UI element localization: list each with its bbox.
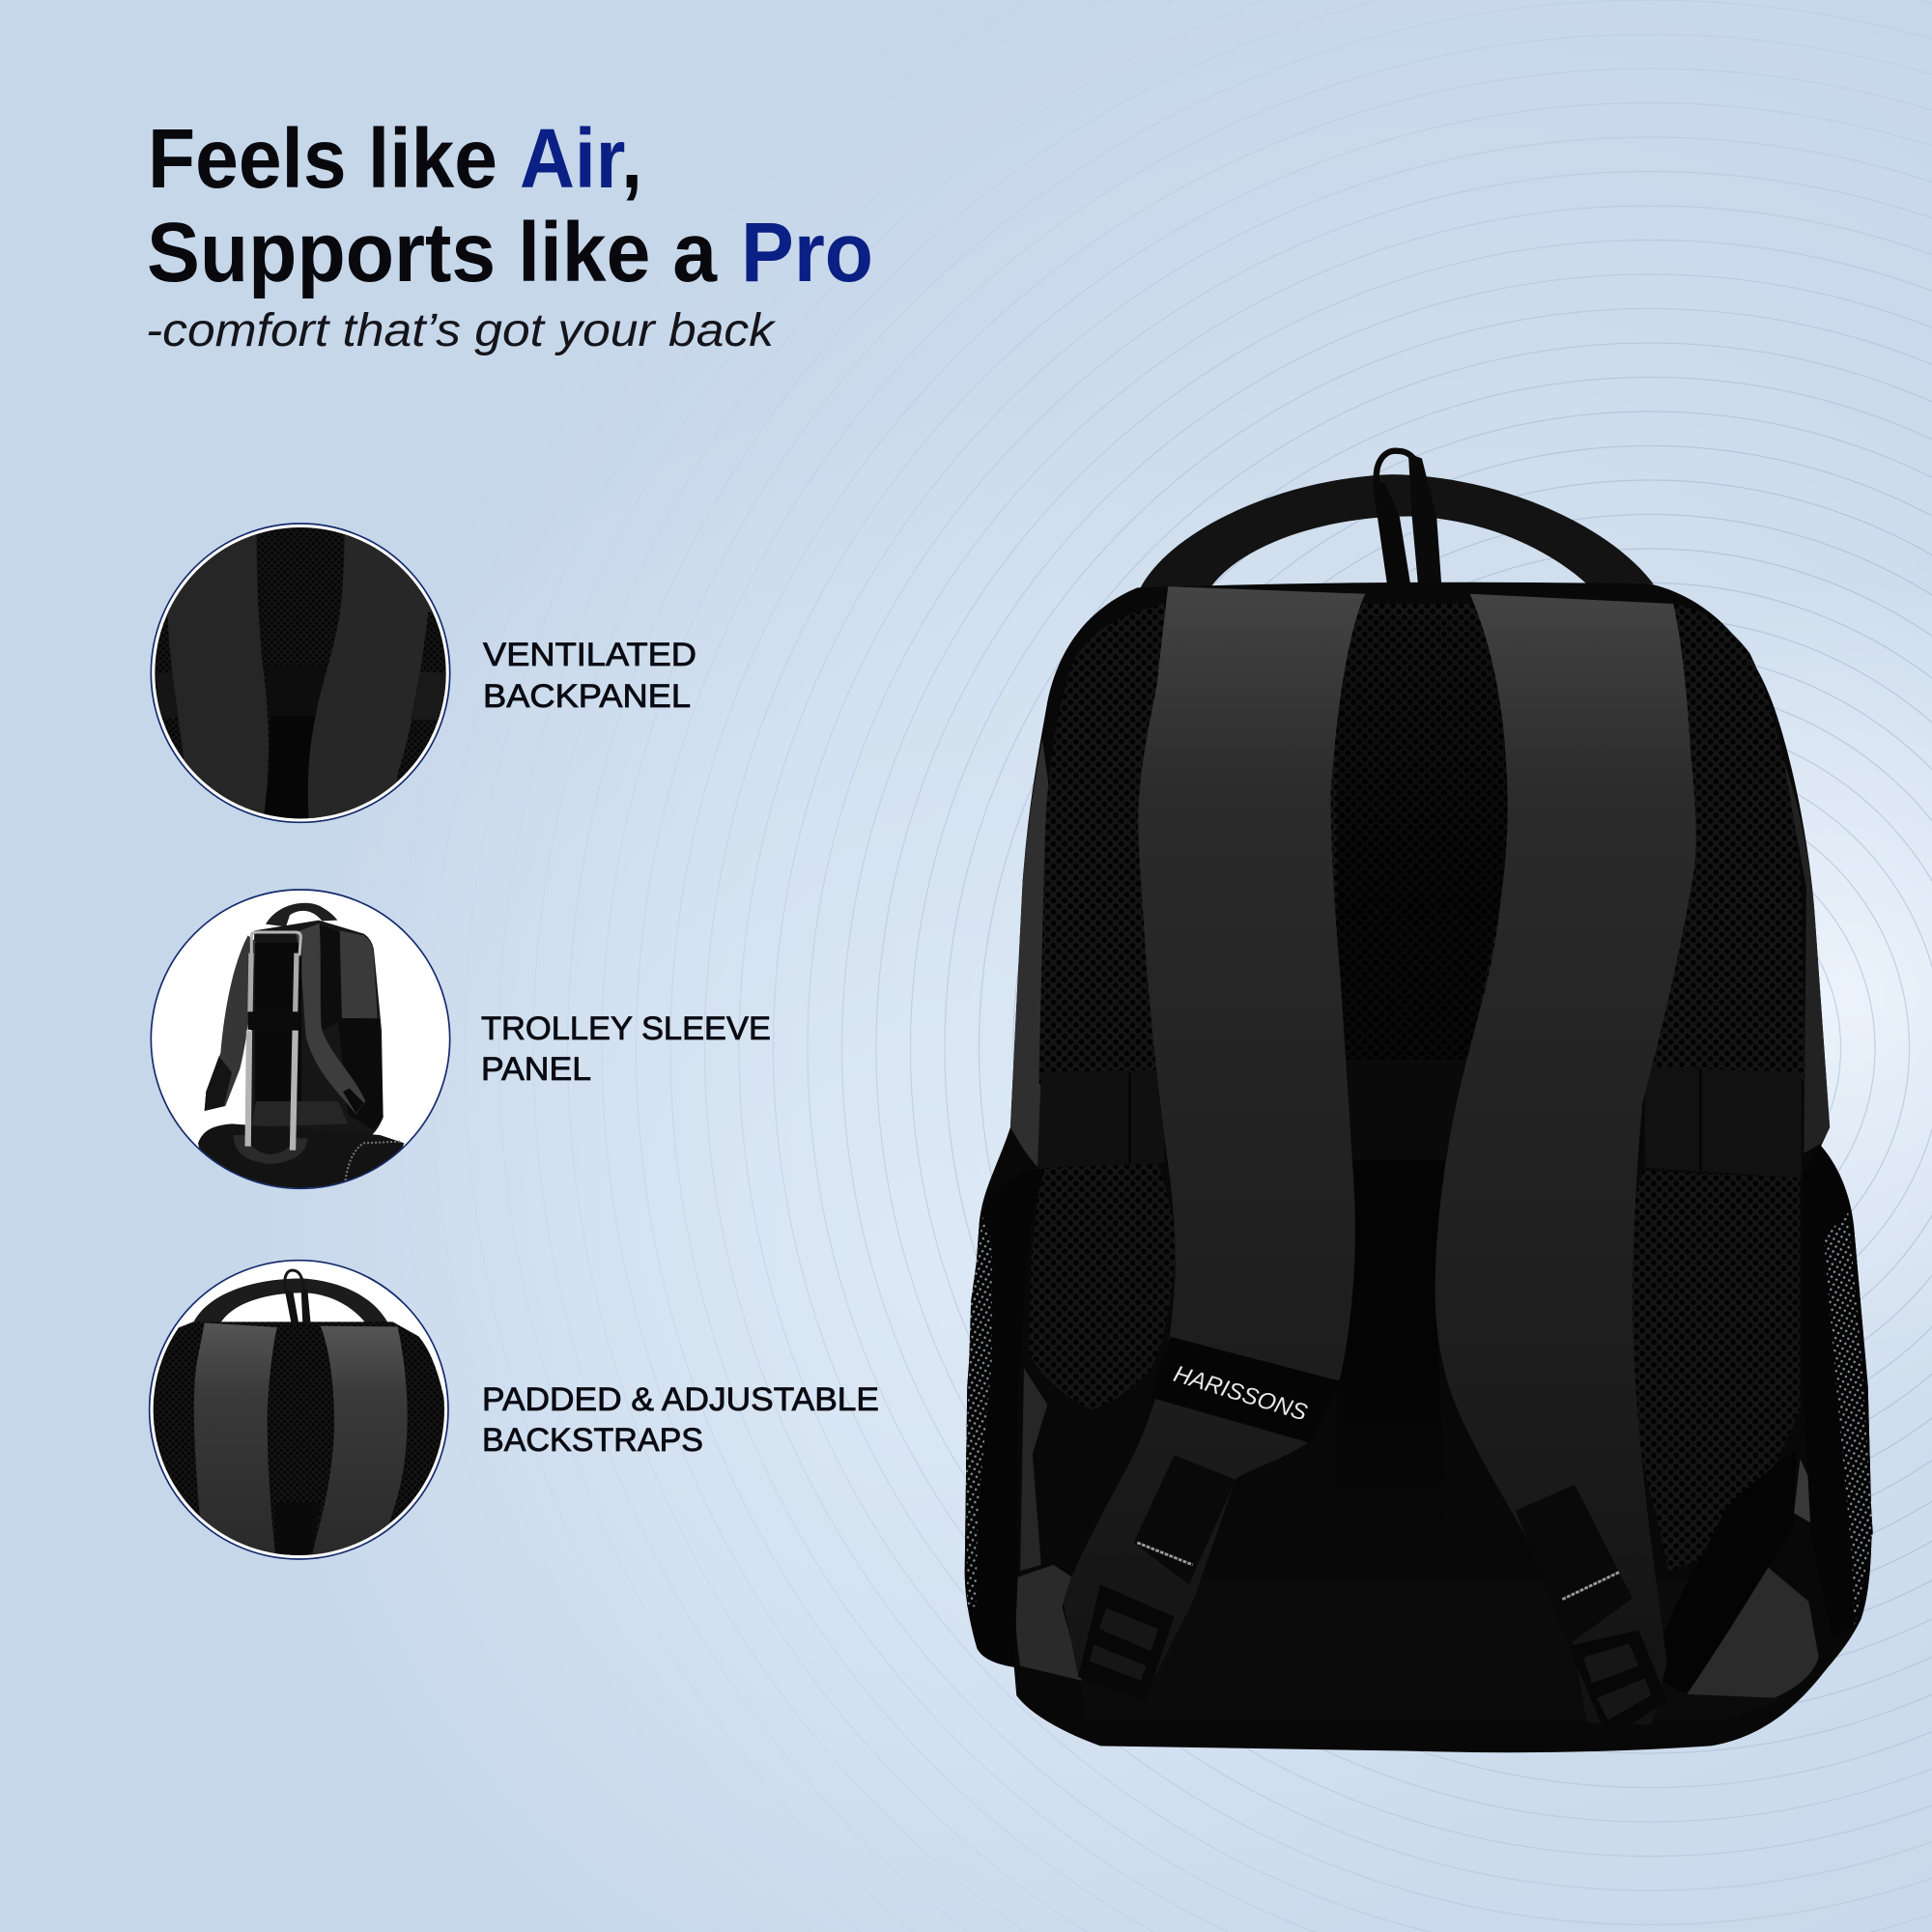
feature 1 label: BACKPANEL — [483, 678, 691, 715]
horizontal bands — [1037, 1060, 1802, 1178]
left gray patch — [1016, 1565, 1082, 1681]
lower left mesh lobe — [1029, 1164, 1176, 1409]
background concentric rings — [533, 0, 1932, 1932]
right small gray panel — [1794, 1459, 1836, 1538]
top handle — [1140, 474, 1654, 589]
title line 2: Pro — [741, 206, 873, 299]
right strap tail — [1651, 1449, 1797, 1694]
right pocket net — [1824, 1212, 1873, 1627]
title line 2: Supports like a — [147, 206, 718, 299]
right mesh pocket — [1802, 1146, 1871, 1640]
left mesh pocket — [965, 1168, 1045, 1667]
feature 1 label — [483, 637, 696, 715]
feature 1 label: VENTILATED — [483, 637, 696, 673]
upper ventilated mesh panel — [1038, 604, 1805, 1084]
hanging loop — [1373, 451, 1441, 586]
feature 3 label: PADDED & ADJUSTABLE — [482, 1381, 879, 1418]
feature 2 label — [481, 1010, 771, 1088]
main backpack — [965, 451, 1873, 1752]
left stitch — [1137, 1543, 1193, 1565]
feature 3 label — [482, 1381, 879, 1459]
right buckle — [1569, 1630, 1667, 1740]
lower right mesh lobe — [1616, 1171, 1801, 1571]
left side gray sliver — [1020, 1368, 1047, 1571]
left pocket net — [966, 1212, 992, 1606]
feature 2 label: TROLLEY SLEEVE — [481, 1010, 771, 1047]
title line 1: Air, — [520, 112, 642, 206]
feature 1: ventilated backpanel circle — [145, 515, 461, 831]
left shoulder strap — [1064, 586, 1365, 1694]
feature 3: padded backstraps circle — [150, 1261, 448, 1562]
feature 2 label: PANEL — [481, 1051, 591, 1088]
feature 3 label: BACKSTRAPS — [482, 1422, 703, 1459]
title — [147, 112, 873, 299]
right gray patch — [1687, 1567, 1819, 1698]
right shoulder strap — [1435, 594, 1696, 1725]
left buckle — [1078, 1584, 1175, 1700]
subtitle: -comfort that’s got your back — [146, 305, 777, 356]
right side panel — [1780, 752, 1830, 1153]
title line 1: Feels like — [148, 112, 497, 206]
right webbing — [1516, 1485, 1633, 1645]
centre spine shadow — [1337, 616, 1509, 1552]
brand label — [1150, 1337, 1341, 1443]
left webbing — [1133, 1455, 1236, 1584]
right stitch — [1562, 1573, 1619, 1600]
left side panel — [1010, 739, 1050, 1173]
bag body — [965, 582, 1871, 1752]
brand label: HARISSONS — [1171, 1361, 1310, 1426]
bottom centre panel — [1072, 1579, 1780, 1719]
feature 2: trolley sleeve circle — [151, 890, 450, 1191]
